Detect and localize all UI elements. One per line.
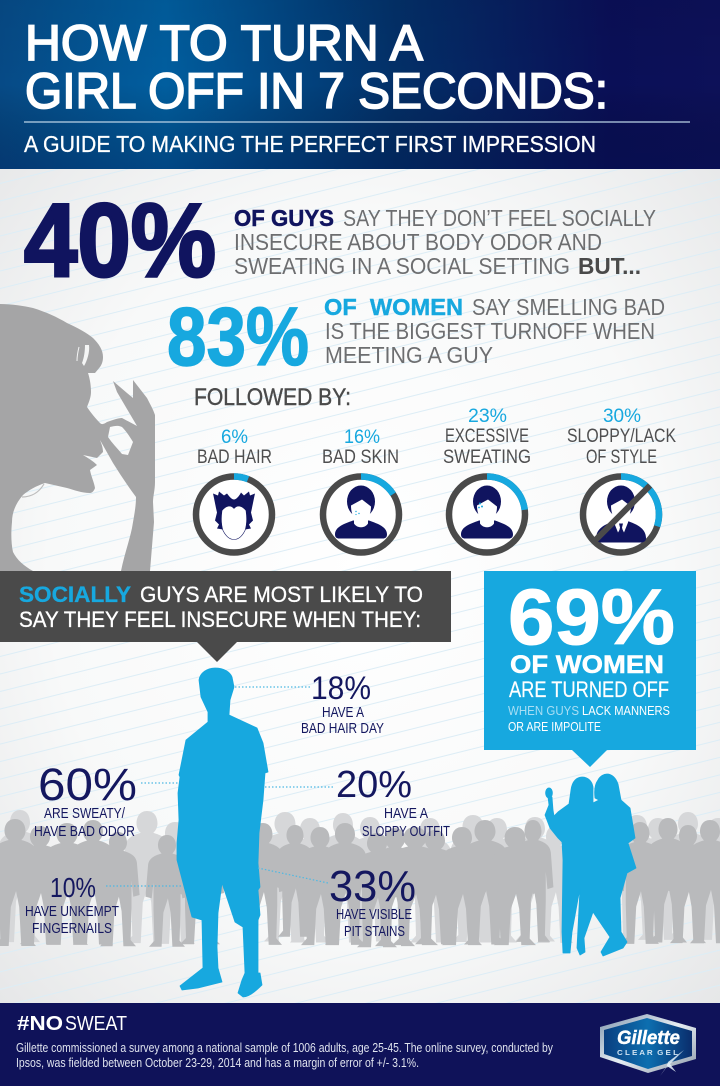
stat: 33% pit stains: HAVE VISIBLE <box>336 907 412 923</box>
item: bad skin 16% <box>322 426 399 552</box>
icon: ring with spiky hair <box>196 476 272 552</box>
stat: 83% of women <box>167 290 665 383</box>
survey note <box>16 1041 554 1070</box>
description text <box>234 205 656 279</box>
logo: Gillette Clear Gel <box>600 1014 696 1076</box>
stat: 10% fingernails: FINGERNAILS <box>32 921 112 937</box>
percent and label <box>197 426 272 468</box>
stat: 60% sweaty: HAVE BAD ODOR <box>34 824 135 840</box>
stat: 33% pit stains: PIT STAINS <box>344 924 405 940</box>
footer <box>0 1003 720 1086</box>
stat: 33% pit stains: 33% <box>329 862 416 911</box>
icon: ring with head <box>323 476 399 552</box>
percent and label: 6% <box>221 426 248 448</box>
percent and label: OF STYLE <box>586 446 657 468</box>
percent and label: BAD SKIN <box>322 446 399 468</box>
percent and label: 23% <box>468 405 507 427</box>
description text: INSECURE ABOUT BODY ODOR AND <box>234 229 602 255</box>
percent and label: 30% <box>603 405 641 427</box>
percent and label: SWEATING <box>443 446 531 468</box>
banner text: SAY THEY FEEL INSECURE WHEN THEY: <box>19 607 421 632</box>
detail text <box>508 704 670 734</box>
stat: 33% pit stains <box>329 862 416 940</box>
front row <box>0 818 720 947</box>
detail text: OR ARE IMPOLITE <box>508 720 601 734</box>
title: HOW TO TURN A <box>25 15 424 71</box>
big number 83%: 83% <box>167 290 309 383</box>
dark callout banner <box>0 571 451 662</box>
stat: 18% bad hair day: HAVE A <box>322 705 364 721</box>
stat: 18% bad hair day: BAD HAIR DAY <box>301 721 384 737</box>
big number 69%: 69% <box>508 572 675 661</box>
stat: 10% fingernails <box>25 872 119 937</box>
blue callout: 69% of women <box>484 571 696 767</box>
of women: OF WOMEN <box>510 651 664 679</box>
item: sloppy style 30% <box>567 405 676 552</box>
stat: 60% sweaty: ARE SWEATY/ <box>44 806 126 822</box>
stat: 20% sloppy outfit: 20% <box>336 764 412 806</box>
percent and label <box>443 405 531 468</box>
description text: SWEATING IN A SOCIAL SETTING <box>234 253 570 279</box>
stat: 10% fingernails: HAVE UNKEMPT <box>25 904 119 920</box>
percent and label: SLOPPY/LACK <box>567 425 676 447</box>
title: GIRL OFF IN 7 SECONDS: <box>25 63 608 119</box>
crowd silhouette <box>0 810 720 947</box>
stat: 40% of guys <box>24 183 656 299</box>
stat: 20% sloppy outfit: HAVE A <box>384 806 428 822</box>
banner text: SOCIALLY <box>19 582 131 607</box>
description text: MEETING A GUY <box>325 342 493 368</box>
stat: 60% sweaty <box>34 759 137 840</box>
banner text: GUYS ARE MOST LIKELY TO <box>140 582 423 607</box>
item: bad hair 6% <box>196 426 272 552</box>
stat: 20% sloppy outfit: SLOPPY OUTFIT <box>362 824 450 840</box>
icon: ring with sweating head <box>449 476 525 552</box>
description text: BUT... <box>578 253 641 279</box>
detail text: LACK MANNERS <box>582 704 670 718</box>
stat: 10% fingernails: 10% <box>50 872 96 903</box>
heading: followed by: FOLLOWED BY: <box>194 384 351 411</box>
back row <box>0 810 720 944</box>
stat: 20% sloppy outfit <box>336 764 450 840</box>
percent and label: 16% <box>344 426 380 448</box>
percent and label <box>567 405 676 468</box>
connector lines <box>106 687 335 886</box>
earring <box>22 484 44 497</box>
hashtag <box>17 1012 127 1035</box>
percent and label: BAD HAIR <box>197 446 272 468</box>
title <box>25 15 608 119</box>
description text: SAY THEY DON’T FEEL SOCIALLY <box>343 205 656 231</box>
banner text <box>19 582 423 632</box>
survey note: Gillette commissioned a survey among a national sample of 1006 adults, age 25-45. The online survey, conducted by <box>16 1041 554 1055</box>
detail text: WHEN GUYS <box>508 704 579 718</box>
subtitle: A GUIDE TO MAKING THE PERFECT FIRST IMPRESSION <box>24 131 596 157</box>
description text <box>324 294 665 368</box>
description text: SAY SMELLING BAD <box>472 294 665 320</box>
man silhouette <box>177 668 268 997</box>
are turned off: ARE TURNED OFF <box>509 677 669 702</box>
icon: ring with crossed-out suited man <box>583 476 659 552</box>
stat: 60% sweaty: 60% <box>38 759 137 810</box>
percent and label <box>322 426 399 468</box>
stat: 18% bad hair day: 18% <box>311 670 371 706</box>
two women silhouette <box>545 774 636 956</box>
survey note: Ipsos, was fielded between October 23-29, 2014 and has a margin of error of +/- 3.1%. <box>16 1056 419 1070</box>
hashtag: SWEAT <box>65 1012 127 1035</box>
background panel <box>0 168 720 1004</box>
percent and label: EXCESSIVE <box>445 425 529 447</box>
description text: IS THE BIGGEST TURNOFF WHEN <box>325 318 655 344</box>
description text: OF GUYS <box>234 205 334 231</box>
hashtag: #NO <box>17 1012 63 1035</box>
stat: 18% bad hair day <box>301 670 384 737</box>
header banner <box>0 0 720 169</box>
woman holding nose silhouette <box>0 304 155 571</box>
logo: Gillette Clear Gel: Gillette <box>617 1028 680 1049</box>
logo: Gillette Clear Gel: C L E A R G E L <box>617 1050 679 1057</box>
description text: OF WOMEN <box>324 294 463 320</box>
big number 40%: 40% <box>24 183 216 299</box>
item: excessive sweating 23% <box>443 405 531 552</box>
